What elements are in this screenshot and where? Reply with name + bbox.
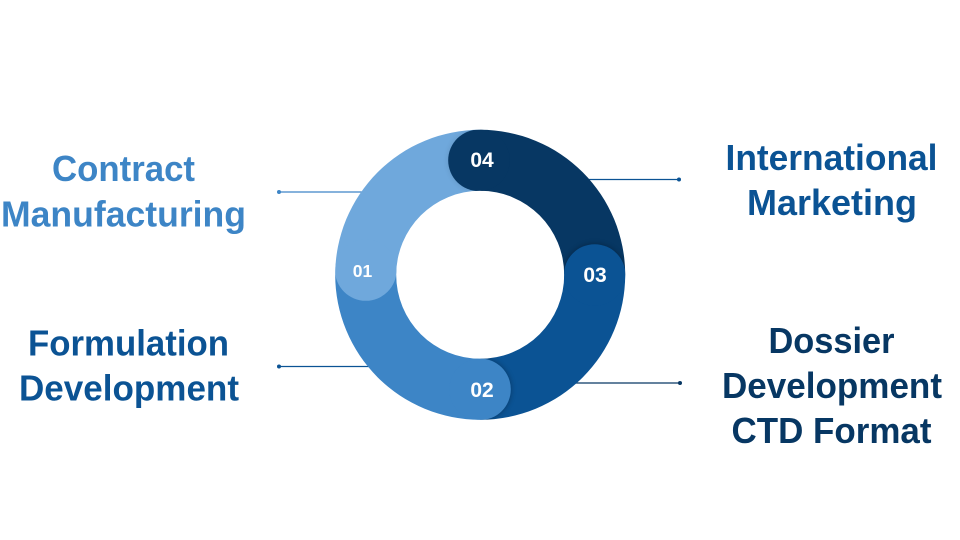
label: International Marketing: Marketing [747,182,917,223]
connector: International Marketing [586,178,681,182]
label: International Marketing [726,137,938,223]
label: Contract Manufacturing: Manufacturing [1,194,246,234]
label: Dossier Development CTD Format: Development [722,365,942,406]
number 02: 02 [470,379,494,402]
number 04: 04 [470,149,494,172]
label: Formulation Development: Development [19,368,239,408]
connector: Contract Manufacturing [277,190,362,194]
segment 04 arc [480,160,595,275]
label: Dossier Development CTD Format: CTD Format [732,410,932,451]
label: Contract Manufacturing: Contract [52,148,195,189]
segment 02 arc [366,275,480,389]
number 01: 01 [353,261,372,281]
label: Contract Manufacturing [1,148,246,234]
segment 03 rounded head [564,242,626,280]
segment 01 arc [366,160,480,275]
segment 02 rounded head [475,358,514,420]
label: Formulation Development [19,322,239,408]
label: Dossier Development CTD Format: Dossier [768,320,894,361]
segment 03 arc [480,275,595,389]
segment 04 rounded head [447,130,484,191]
segment 01 rounded head [335,263,396,301]
infographic canvas [3,130,942,444]
connector: Formulation Development [277,364,372,368]
label: International Marketing: International [726,137,938,178]
donut ring chart [335,129,626,420]
connector: Dossier Development CTD Format [574,381,682,385]
label: Formulation Development: Formulation [28,322,229,364]
number 03: 03 [583,264,607,287]
label: Dossier Development CTD Format [722,320,942,451]
